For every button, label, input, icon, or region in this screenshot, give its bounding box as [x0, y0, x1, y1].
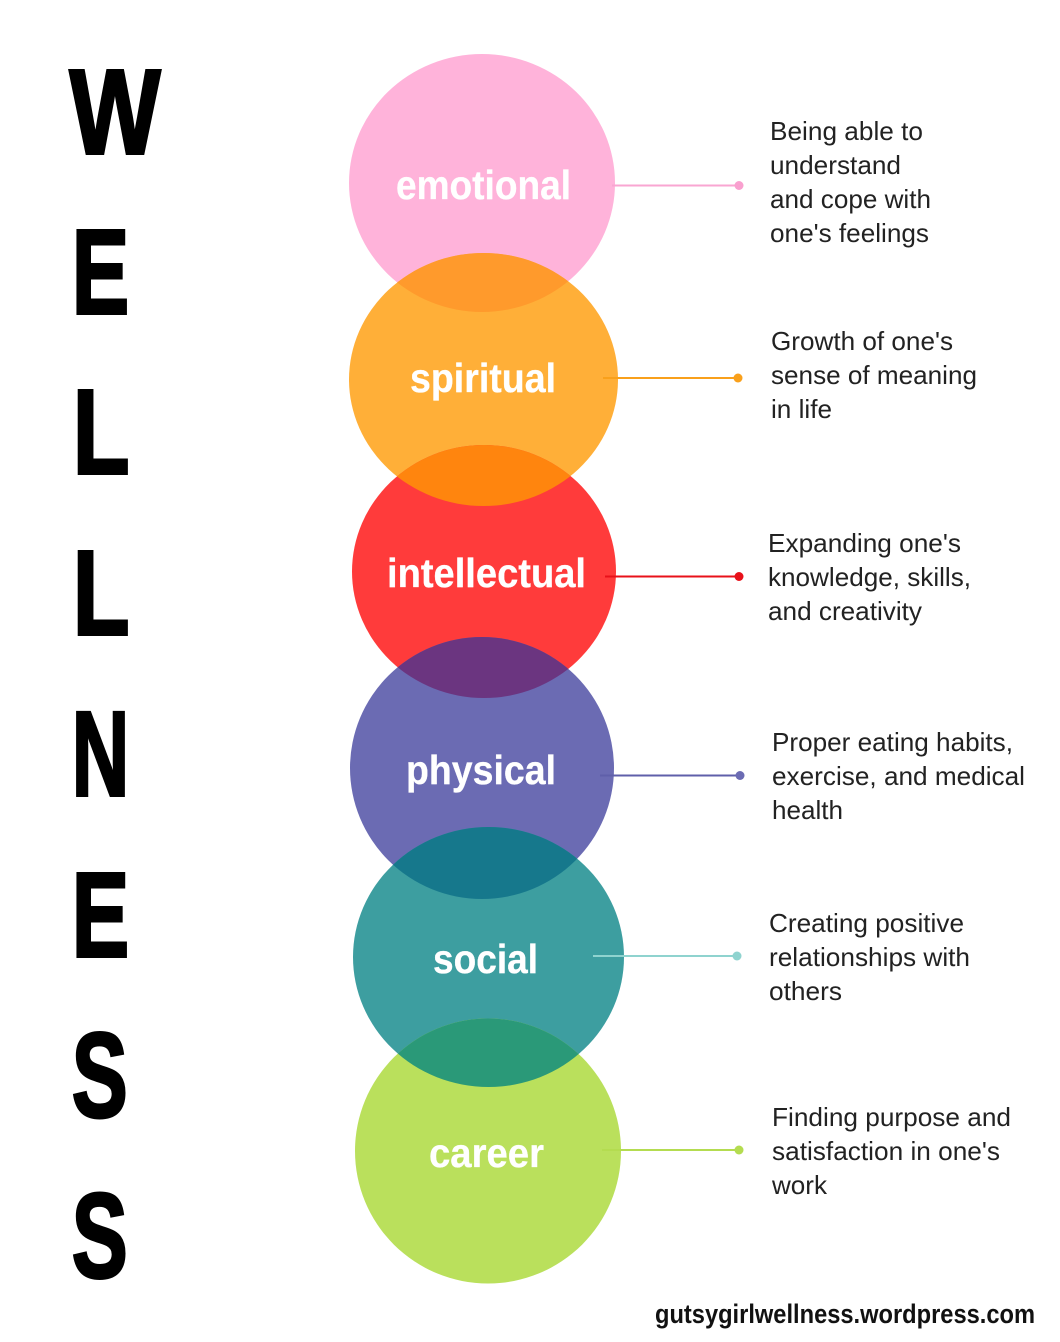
- circle: physical: [350, 637, 614, 899]
- description: spiritual: [771, 326, 977, 424]
- circle: career: [355, 1018, 621, 1284]
- connector: career: [602, 1146, 744, 1154]
- description: physical: health: [772, 795, 843, 825]
- overlap: physical and social: [393, 827, 578, 899]
- circle labels: social: [433, 936, 538, 982]
- title: vertical WELLNESS: L: [73, 364, 130, 500]
- description: physical: [772, 727, 1025, 825]
- description: intellectual: Expanding one's: [768, 528, 961, 558]
- description: spiritual: Growth of one's: [771, 326, 953, 356]
- description: career: satisfaction in one's: [772, 1136, 1000, 1166]
- description: intellectual: [768, 528, 971, 626]
- title: vertical WELLNESS: E: [72, 846, 129, 982]
- overlap: emotional and spiritual: [397, 253, 568, 312]
- connector: emotional: [612, 181, 744, 190]
- circle labels: physical: [406, 747, 556, 793]
- circle labels: [387, 162, 586, 1176]
- connector: physical: [600, 771, 744, 780]
- overlap: spiritual and intellectual: [397, 445, 570, 506]
- description: emotional: [770, 116, 931, 248]
- description: emotional: understand: [770, 150, 901, 180]
- description: social: Creating positive: [769, 908, 964, 938]
- description: social: relationships with: [769, 942, 970, 972]
- description: career: work: [771, 1170, 828, 1200]
- circle labels: career: [429, 1130, 544, 1176]
- title: vertical WELLNESS: E: [72, 204, 129, 340]
- description: career: Finding purpose and: [772, 1102, 1011, 1132]
- description: intellectual: and creativity: [768, 596, 922, 626]
- description: intellectual: knowledge, skills,: [768, 562, 971, 592]
- circle: emotional: [349, 54, 615, 312]
- connector: spiritual: [603, 374, 742, 382]
- description: social: [769, 908, 970, 1006]
- description: spiritual: in life: [771, 394, 832, 424]
- circle: intellectual: [352, 445, 616, 698]
- description: emotional: and cope with: [770, 184, 931, 214]
- title: vertical WELLNESS: S: [72, 1168, 128, 1304]
- title: vertical WELLNESS: L: [73, 524, 130, 660]
- title: vertical WELLNESS: W: [70, 44, 161, 180]
- circle stack: [349, 54, 624, 1284]
- overlap: intellectual and physical: [398, 637, 568, 698]
- description: spiritual: sense of meaning: [771, 360, 977, 390]
- description: physical: Proper eating habits,: [772, 727, 1013, 757]
- title: vertical WELLNESS: S: [72, 1007, 128, 1143]
- description: emotional: one's feelings: [770, 218, 929, 248]
- circle: spiritual: [349, 253, 618, 506]
- circle: social: [353, 827, 624, 1087]
- circle labels: emotional: [396, 162, 571, 208]
- title: vertical WELLNESS: [70, 44, 161, 1304]
- connector: social: [593, 952, 742, 960]
- description: social: others: [769, 976, 842, 1006]
- description: emotional: Being able to: [770, 116, 923, 146]
- title: vertical WELLNESS: N: [72, 686, 129, 822]
- connector: intellectual: [605, 572, 744, 581]
- description: physical: exercise, and medical: [772, 761, 1025, 791]
- overlap: social and career: [398, 1018, 578, 1087]
- circle labels: spiritual: [410, 355, 556, 401]
- circle labels: intellectual: [387, 550, 586, 596]
- description: career: [771, 1102, 1011, 1200]
